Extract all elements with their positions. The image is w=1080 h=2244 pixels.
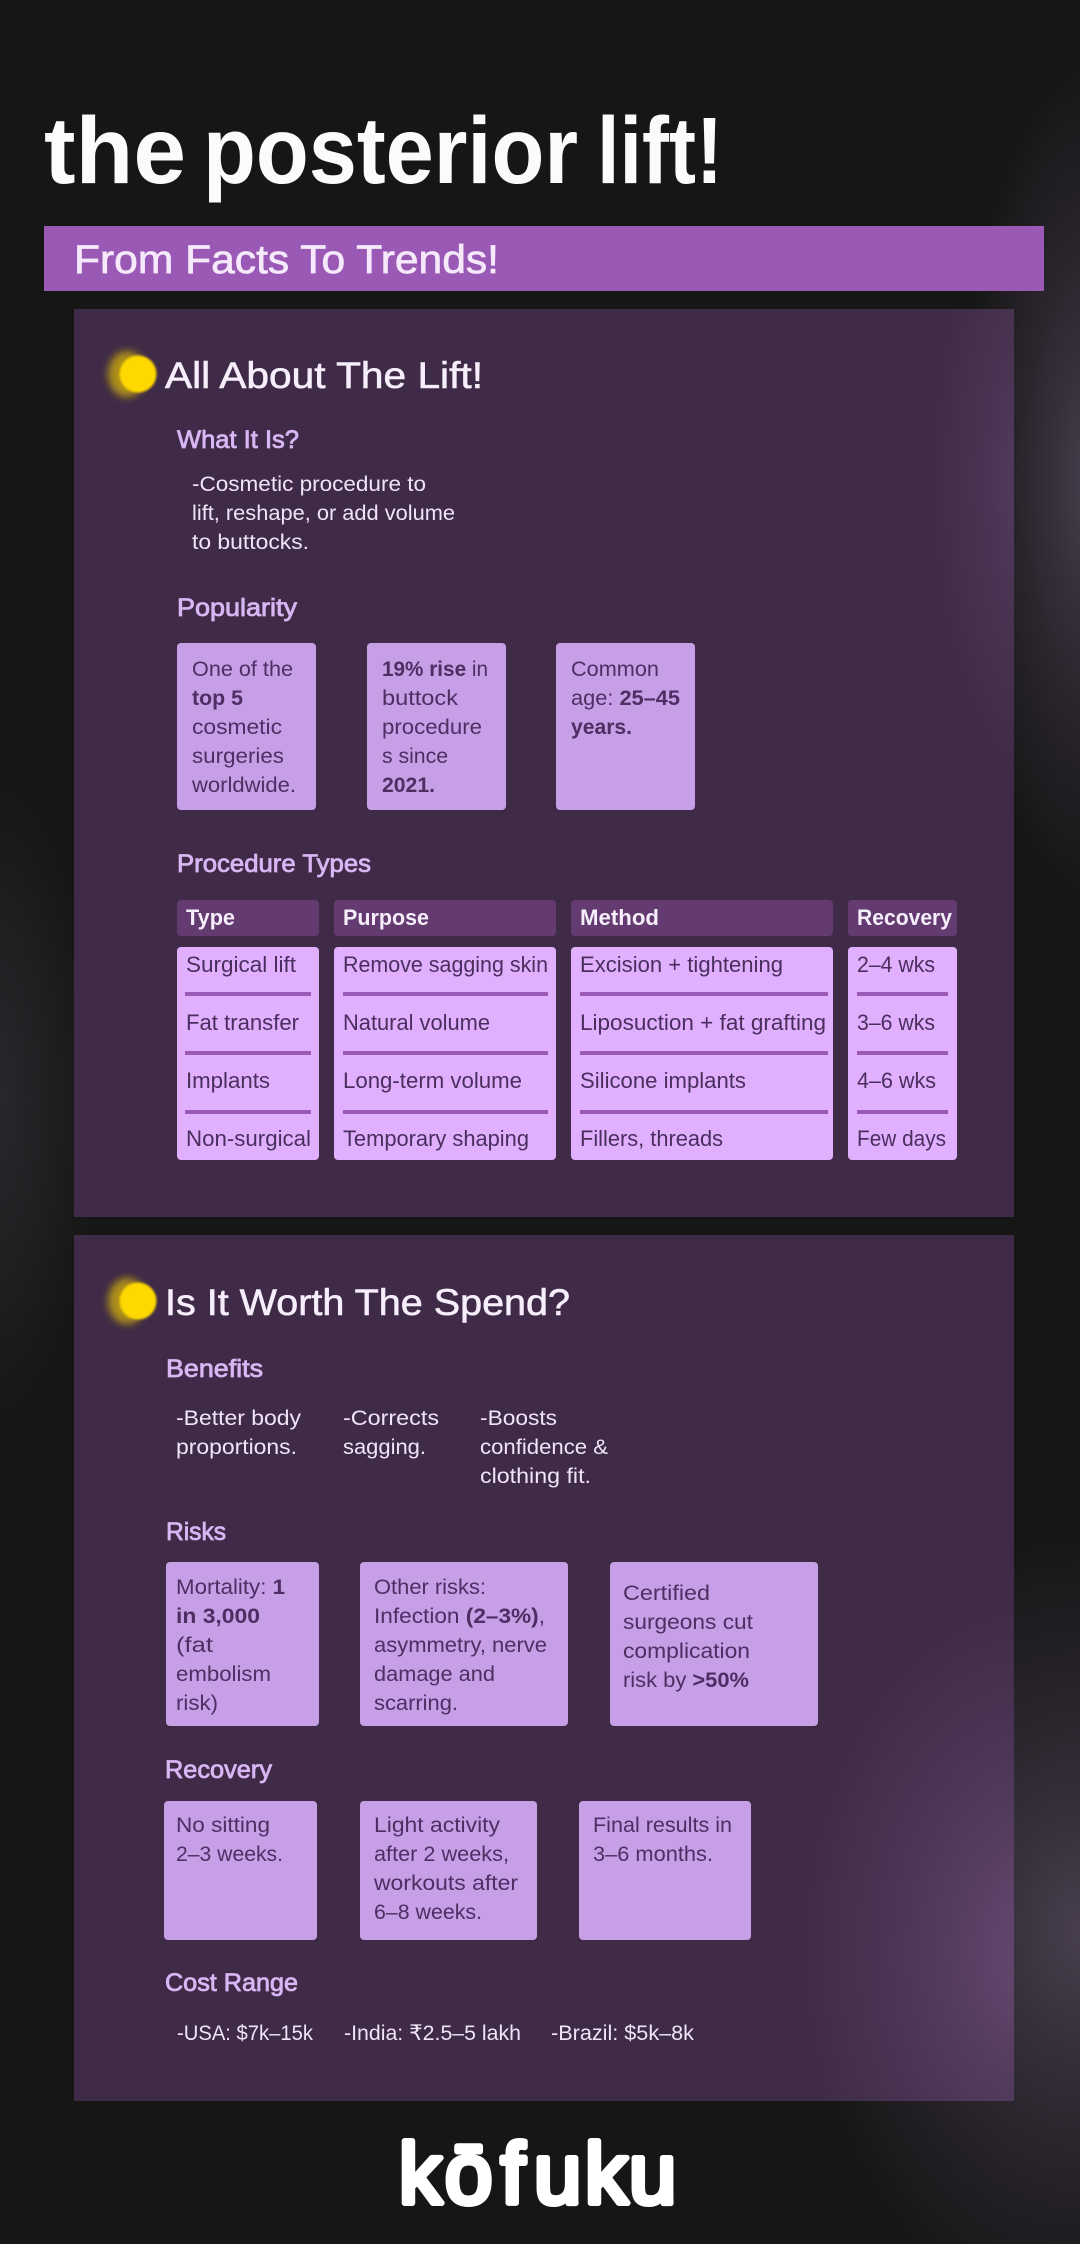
table: procedure types [177,900,957,1160]
column: method [571,900,833,1160]
card: mortality: (fat [176,1633,213,1657]
column: method: Liposuction + fat grafting [580,1010,826,1035]
card: 19% rise: s since [382,744,448,768]
text: benefits: sagging. [343,1435,426,1459]
icon: yellow dot [108,1278,156,1324]
card: top 5: cosmetic [192,715,282,739]
column: type: Fat transfer [186,1010,299,1035]
text: benefits: -Better body [176,1406,301,1430]
card: final results [579,1801,751,1940]
column: type: Type [186,905,235,930]
heading: recovery: Recovery [165,1756,273,1784]
heading: procedure types: Procedure Types [177,850,371,878]
card: 19% rise: buttock [382,686,458,710]
column: type: Surgical lift [186,952,296,977]
column: recovery: Few days [857,1126,946,1151]
card: other risks: Other risks: [374,1575,486,1599]
card: mortality: embolism [176,1662,271,1686]
column: purpose: Natural volume [343,1010,490,1035]
text: definition: lift, reshape, or add volume [192,501,455,525]
card: light activity [360,1801,537,1940]
text: benefits: -Corrects [343,1406,439,1430]
text: definition: -Cosmetic procedure to [192,472,426,496]
text: definition [192,472,455,554]
column: purpose [334,900,556,1160]
column: method: Method [580,905,659,930]
card: common age: years. [571,715,632,739]
card: 19% rise: 2021. [382,773,435,797]
card: certified surgeons: surgeons cut [623,1610,753,1634]
text: benefits [176,1406,608,1488]
card: top 5: surgeries [192,744,284,768]
card: final results: Final results in [593,1813,732,1837]
card: mortality: in 3,000 [176,1604,260,1628]
column: type: Implants [186,1068,270,1093]
card: certified surgeons: risk by >50% [623,1668,749,1692]
column: purpose: Temporary shaping [343,1126,529,1151]
text: benefits: proportions. [176,1435,297,1459]
card: common age: Common [571,657,659,681]
card: 19% rise: procedure [382,715,482,739]
heading: benefits: Benefits [166,1355,263,1383]
card: mortality: Mortality: 1 [176,1575,285,1599]
column: method: Fillers, threads [580,1126,723,1151]
column: type [177,900,319,1160]
card: no sitting [164,1801,317,1940]
card: light activity: 6–8 weeks. [374,1900,482,1924]
text: benefits: clothing fit. [480,1464,591,1488]
card: other risks: scarring. [374,1691,458,1715]
card: other risks [360,1562,568,1726]
card: certified surgeons: Certified [623,1581,710,1605]
column: recovery: 3–6 wks [857,1010,935,1035]
title: posterior [203,98,578,204]
heading: popularity: Popularity [177,594,298,622]
card: common age: age: 25–45 [571,686,680,710]
subtitle banner: From Facts To Trends! [74,238,499,282]
title: lift! [597,98,723,204]
column: recovery: Recovery [857,905,952,930]
column: type: Non-surgical [186,1126,311,1151]
card: top 5: One of the [192,657,293,681]
column: recovery: 2–4 wks [857,952,935,977]
heading: what it is: What It Is? [177,426,299,454]
text: benefits: -Boosts [480,1406,557,1430]
card: top 5 [177,643,316,810]
text: cost range: -India: ₹2.5–5 lakh [344,2021,521,2045]
card: mortality [166,1562,319,1726]
title: the [44,98,186,204]
text: cost range [177,2021,694,2045]
heading: all about the lift: All About The Lift! [165,355,483,396]
heading: risks: Risks [166,1518,226,1546]
text: benefits: confidence & [480,1435,608,1459]
card: certified surgeons: complication [623,1639,750,1663]
card: 19% rise: 19% rise in [382,657,488,681]
card: mortality: risk) [176,1691,218,1715]
card: light activity: after 2 weeks, [374,1842,509,1866]
column: purpose: Remove sagging skin [343,952,548,977]
column: recovery: 4–6 wks [857,1068,936,1093]
column: method: Excision + tightening [580,952,783,977]
card: top 5: worldwide. [191,773,296,797]
card: 19% rise [367,643,506,810]
icon: yellow dot [108,351,156,397]
card: light activity: Light activity [374,1813,500,1837]
heading: cost range: Cost Range [165,1969,298,1997]
logo: kofuku: kōfuku [399,2127,676,2222]
card: other risks: asymmetry, nerve [374,1633,547,1657]
column: purpose: Purpose [343,905,429,930]
card: other risks: damage and [374,1662,495,1686]
text: cost range: -USA: $7k–15k [177,2021,313,2045]
heading: is it worth the spend: Is It Worth The Spend? [165,1282,570,1323]
title [44,98,723,204]
panel: is it worth the spend [74,1235,1014,2101]
column: recovery [848,900,957,1160]
card: other risks: Infection (2–3%), [374,1604,545,1628]
column: purpose: Long-term volume [343,1068,522,1093]
card: no sitting: No sitting [176,1813,270,1837]
column: method: Silicone implants [580,1068,746,1093]
card: common age [556,643,695,810]
card: no sitting: 2–3 weeks. [176,1842,283,1866]
panel: all about the lift [74,309,1014,1217]
subtitle banner [44,226,1044,291]
text: definition: to buttocks. [192,530,309,554]
card: light activity: workouts after [373,1871,518,1895]
card: certified surgeons [610,1562,818,1726]
card: top 5: top 5 [192,686,243,710]
card: final results: 3–6 months. [593,1842,713,1866]
text: cost range: -Brazil: $5k–8k [551,2021,694,2045]
